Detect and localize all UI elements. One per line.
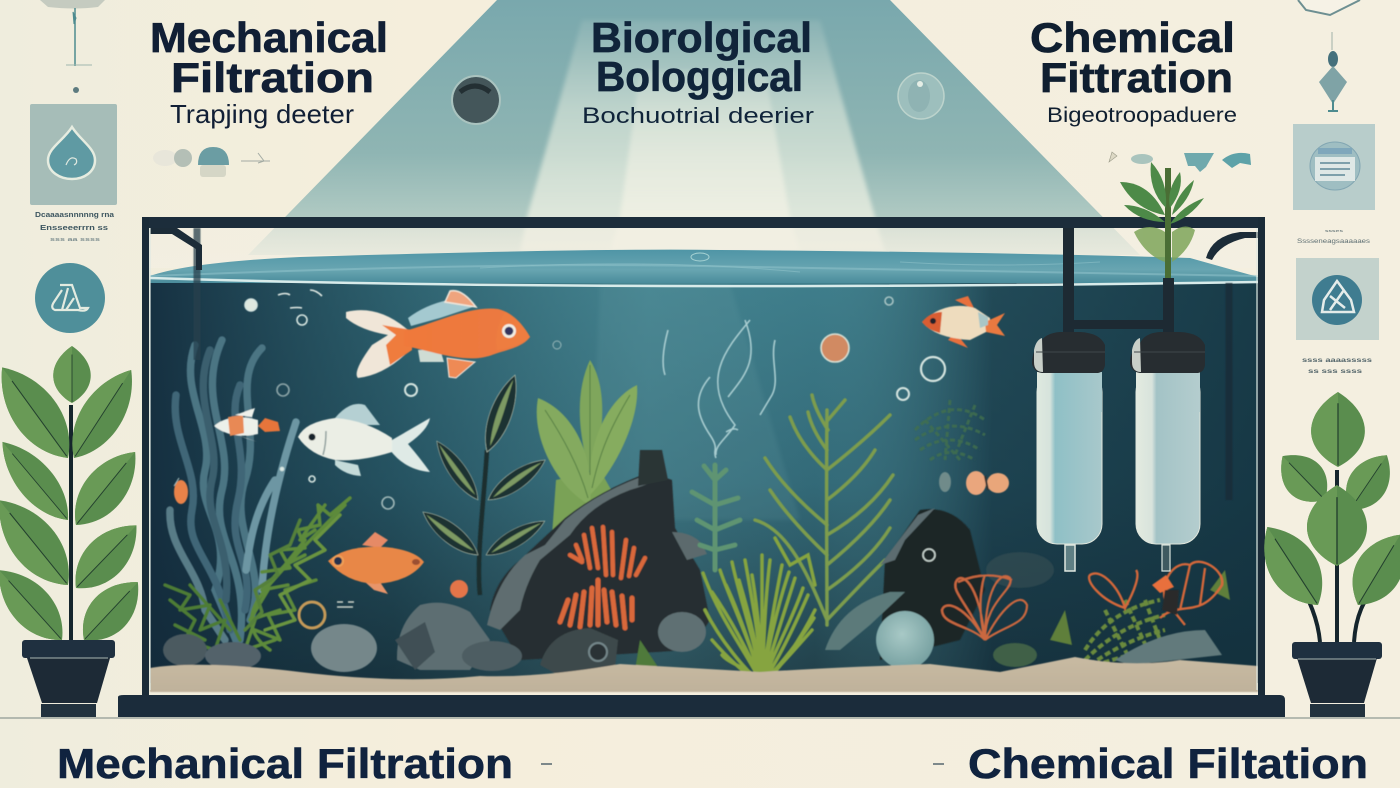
orange butterfly fish (939, 471, 1009, 495)
left and bottom rocks (163, 603, 706, 676)
tall fern (755, 395, 893, 625)
air gap above water (149, 228, 1258, 268)
aquarium (118, 162, 1285, 717)
top bubble left (452, 76, 500, 124)
icon: hanging droplet (40, 0, 105, 93)
right-centre dark rock and speckled stone (825, 508, 985, 669)
blue seaweed (170, 340, 296, 650)
icon card: water drop (30, 104, 117, 205)
orange pebble (450, 580, 468, 598)
frame right post (1258, 217, 1265, 697)
heading: mechanical filtration: Trapjing deeter (170, 99, 354, 129)
icon: hanging ornament top (1298, 0, 1360, 111)
footer label: chemical filtration: Chemical Filtation (968, 740, 1368, 787)
small caption, left card: sss aa ssss (50, 237, 100, 243)
heading: chemical filtration: Fittration (1040, 54, 1233, 101)
top bubble right (898, 73, 944, 119)
pot (22, 640, 115, 717)
fish: white fish (298, 404, 430, 476)
fish: large goldfish (346, 291, 530, 378)
frame corner brace right (1206, 232, 1258, 260)
tank right rod (1226, 283, 1232, 500)
light cone from above (248, 0, 1140, 255)
frame top bar (142, 217, 1265, 228)
heading: biological filtration: Bologgical (596, 53, 803, 100)
heading: biological filtration: Biorolgical (591, 14, 812, 61)
icon: teal circle badge (35, 263, 105, 333)
frame corner brace left (150, 228, 202, 270)
filter canister 1 (1032, 332, 1105, 571)
green lace plant (165, 498, 350, 650)
small caption, right card: Sssseneagsaaaaaes (1297, 238, 1371, 245)
pipes (1063, 228, 1174, 336)
heading: chemical filtration: Bigeotroopaduere (1047, 104, 1237, 127)
orange coral upper (570, 527, 645, 578)
right column icons (452, 0, 1379, 375)
icon card: document (1293, 124, 1375, 210)
orange outline coral, left of filter (942, 575, 1027, 640)
bubbles (245, 290, 945, 628)
small icons under chemical heading (1109, 152, 1251, 172)
fish: lower orange fish (328, 532, 424, 594)
small icons under mechanical heading (153, 147, 270, 177)
filter canister 2 (1130, 332, 1205, 571)
heading: biological filtration (582, 14, 814, 128)
left potted plant (0, 346, 153, 717)
water surface (150, 250, 1258, 286)
small green fern (692, 465, 740, 570)
footer dash right (933, 763, 944, 765)
green broad-leaf plant (537, 360, 637, 548)
small caption, lower right card: ss sss ssss (1308, 369, 1363, 375)
small caption, left card (35, 212, 114, 243)
footer label: mechanical filtration: Mechanical Filtration (57, 740, 513, 787)
heading: mechanical filtration (150, 14, 388, 129)
green bushes, lower right (986, 552, 1230, 667)
icon card: recycling knot (1296, 258, 1379, 340)
tank left rod (194, 228, 200, 360)
central rock (487, 450, 710, 660)
heading: chemical filtration: Chemical (1030, 14, 1235, 61)
sand substrate (150, 657, 1258, 692)
small caption, left card: Ensseeerrrn ss (40, 225, 108, 232)
glass edge highlight (150, 228, 1257, 690)
thin roots, centre (663, 320, 775, 458)
frame left post (142, 217, 149, 697)
small caption, left card: Dcaaaasnnnnng rna (35, 212, 114, 219)
orange coral lower (560, 580, 632, 628)
small caption, lower right card (1302, 357, 1373, 375)
background bushy plant, right (915, 400, 985, 460)
fan plant (703, 538, 815, 684)
small caption, right card: ssses (1325, 228, 1343, 233)
small caption, lower right card: ssss aaaasssss (1302, 357, 1373, 364)
dark plant (417, 371, 551, 595)
water body (150, 283, 1258, 683)
top plant above pipe (1120, 162, 1204, 280)
heading: mechanical filtration: Filtration (171, 54, 374, 101)
left column icons (30, 0, 270, 333)
heading: biological filtration: Bochuotrial deerier (582, 103, 814, 128)
heading: mechanical filtration: Mechanical (150, 14, 388, 61)
pot (1292, 642, 1382, 717)
tank base (118, 695, 1285, 717)
right potted plant (1247, 392, 1400, 717)
fish: small clownfish (214, 408, 280, 442)
orange outline coral, under filter (1089, 562, 1222, 625)
heading: chemical filtration (1030, 14, 1237, 127)
footer dash left (541, 763, 552, 765)
left orange fish small (174, 478, 188, 504)
filter canisters and pipes (1032, 228, 1205, 571)
small caption, right card (1297, 228, 1371, 245)
fish: cream fish right (922, 296, 1005, 348)
floor line (0, 717, 1400, 719)
